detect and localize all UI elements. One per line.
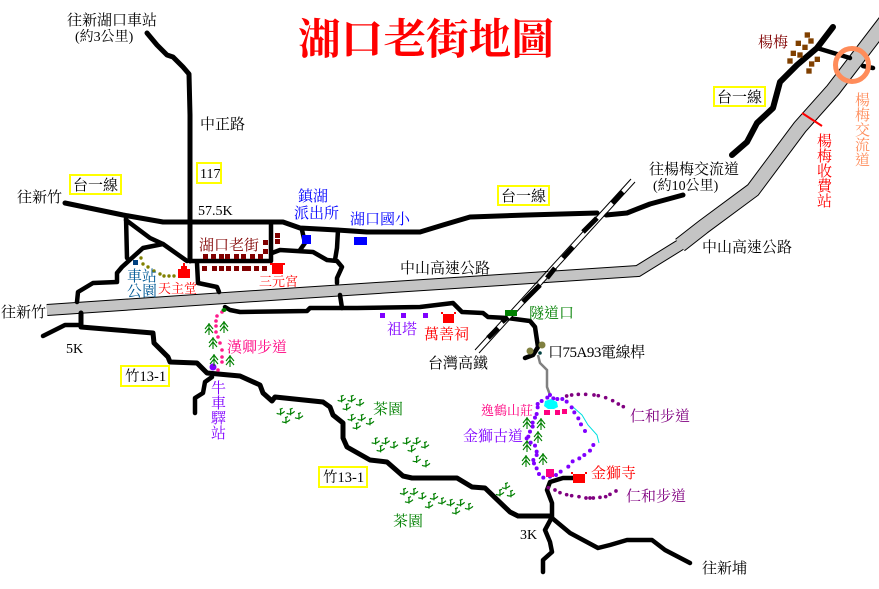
route sign: 竹13-1 east: 竹13-1 xyxy=(323,469,364,486)
icon: 逸鶴山莊 xyxy=(544,399,567,415)
road: 台一線 west xyxy=(65,203,597,232)
label: 往新埔: 往新埔 xyxy=(702,560,747,577)
route sign: 竹13-1 west xyxy=(121,366,169,386)
label: 楊梅交流道 vertical: 道 xyxy=(855,152,870,169)
toll station bar xyxy=(802,113,822,126)
label: 楊梅收費站 vertical: 楊 xyxy=(817,132,832,150)
label: 楊梅收費站 vertical: 站 xyxy=(817,193,832,210)
route sign: 竹13-1 west: 竹13-1 xyxy=(125,368,166,385)
route sign: 台一線 east: 台一線 xyxy=(717,89,762,106)
label: 3K: 3K xyxy=(520,528,537,543)
road: 竹13-1 xyxy=(81,313,550,516)
label: 車站公園: 公園 xyxy=(127,283,157,300)
icon: 牛車驛站 marker xyxy=(210,364,216,370)
label: 往新湖口車站: (約3公里) xyxy=(75,28,134,45)
label: 隧道口: 隧道口 xyxy=(529,305,574,322)
route sign: 117 xyxy=(197,163,221,183)
interchange circle xyxy=(836,48,868,82)
label: 57.5K: 57.5K xyxy=(198,204,233,219)
dots: 仁和步道 north xyxy=(565,392,625,408)
title: 湖口老街地圖 xyxy=(298,17,554,64)
label: 中山高速公路 west: 中山高速公路 xyxy=(400,259,490,277)
label: 祖塔: 祖塔 xyxy=(387,321,417,338)
icon: 隧道口 xyxy=(505,310,517,316)
road: 台一線 to 楊梅 xyxy=(732,27,833,155)
label: 牛車驛站: 驛 xyxy=(210,410,226,427)
楊梅 town markers xyxy=(787,32,820,74)
label: 茶園 south: 茶園 xyxy=(393,512,423,530)
label: 漢卿步道: 漢卿步道 xyxy=(227,338,287,356)
label: 湖口老街: 湖口老街 xyxy=(199,237,259,254)
icon: 湖口國小 xyxy=(354,237,367,245)
stream xyxy=(573,407,599,443)
label: 楊梅收費站 vertical: 費 xyxy=(817,177,833,195)
label: 5K: 5K xyxy=(66,342,83,357)
label: 往新竹 south: 往新竹 xyxy=(1,304,46,321)
route sign: 117: 117 xyxy=(200,167,220,182)
road: 金獅寺 to 3K xyxy=(543,478,573,572)
road: south of highway to tunnel xyxy=(225,303,538,358)
label: 往新湖口車站: 往新湖口車站 xyxy=(67,11,157,29)
label: 鎮湖派出所: 派出所 xyxy=(294,205,339,222)
label: 楊梅交流道 vertical: 交 xyxy=(855,122,870,139)
label: 楊梅交流道 vertical xyxy=(855,91,870,169)
icon: 漢卿步道 trailhead leaf xyxy=(222,308,226,312)
dots: 車站公園 trail xyxy=(139,256,176,278)
trees: 漢卿步道 xyxy=(205,321,234,367)
dots: 金獅古道 loop xyxy=(525,393,595,480)
label: 往新竹 north: 往新竹 xyxy=(17,189,62,206)
label: 往楊梅交流道: 往楊梅交流道 xyxy=(649,160,739,178)
tea plantation leaves xyxy=(277,395,515,515)
railway: 台灣高鐵 xyxy=(475,179,635,353)
label: 萬善祠: 萬善祠 xyxy=(424,325,469,343)
route sign: 台一線 centre: 台一線 xyxy=(501,188,546,205)
label: 台灣高鐵: 台灣高鐵 xyxy=(428,354,488,372)
label: 楊梅: 楊梅 xyxy=(758,33,788,51)
dots: 漢卿步道 xyxy=(214,310,224,372)
label: 楊梅收費站 vertical xyxy=(817,132,833,210)
label: 往楊梅交流道: (約10公里) xyxy=(653,177,719,194)
湖口老街 building markers xyxy=(202,233,280,271)
label: 口75A93電線桿: 口75A93電線桿 xyxy=(548,343,645,361)
label: 牛車驛站: 牛 xyxy=(211,380,226,397)
label: 金獅古道: 金獅古道 xyxy=(463,428,523,445)
icon: 萬善祠 shrine xyxy=(441,312,456,323)
highway: 中山高速公路 xyxy=(47,22,879,310)
label: 中山高速公路 east: 中山高速公路 xyxy=(702,238,792,256)
road: 中正路 xyxy=(147,33,190,261)
label: 鎮湖派出所 xyxy=(294,188,339,222)
route sign: 台一線 west: 台一線 xyxy=(73,177,118,194)
icon: 金獅寺 temple xyxy=(571,472,587,483)
label: 牛車驛站: 車 xyxy=(211,394,226,412)
icon: 天主堂 church xyxy=(178,263,190,278)
label: 楊梅交流道 vertical: 楊 xyxy=(855,91,870,109)
label: 牛車驛站 xyxy=(210,380,226,442)
label: 仁和步道 north: 仁和步道 xyxy=(630,408,690,425)
label: 天主堂: 天主堂 xyxy=(158,281,197,296)
icon: 派出所 xyxy=(302,235,311,244)
label: 楊梅收費站 vertical: 收 xyxy=(817,163,832,180)
icon: 三元宮 temple xyxy=(270,263,285,274)
label: 中正路: 中正路 xyxy=(200,116,245,133)
icon: 金獅古道 junction xyxy=(546,469,554,477)
trees: 金獅古道 xyxy=(522,417,547,467)
old street block roads xyxy=(77,217,342,308)
label: 楊梅交流道 vertical: 流 xyxy=(855,137,870,154)
icon: 車站公園 marker xyxy=(133,260,138,265)
route sign: 竹13-1 east xyxy=(319,467,367,487)
label: 車站公園 xyxy=(127,267,157,300)
label: 鎮湖派出所: 鎮湖 xyxy=(298,188,328,205)
road: 楊梅 interchange xyxy=(817,48,850,58)
label: 往新湖口車站 xyxy=(67,11,157,45)
path: gravel trail xyxy=(538,355,550,395)
label: 金獅寺: 金獅寺 xyxy=(591,465,636,482)
label: 車站公園: 車站 xyxy=(127,267,157,285)
dots: 仁和步道 south xyxy=(546,486,618,500)
road: 台一線 east xyxy=(606,195,683,215)
road: 牛車驛站 branch xyxy=(195,377,212,413)
label: 茶園 north: 茶園 xyxy=(373,400,403,418)
label: 牛車驛站: 站 xyxy=(211,425,226,442)
label: 仁和步道 south: 仁和步道 xyxy=(626,488,686,505)
label: 楊梅交流道 vertical: 梅 xyxy=(855,106,870,124)
road: 5K branch xyxy=(43,325,81,336)
icon: 祖塔 markers xyxy=(380,313,428,318)
tree symbols: 電線桿 xyxy=(526,342,546,355)
road: interchange east stub xyxy=(863,66,873,68)
label: 逸鶴山莊: 逸鶴山莊 xyxy=(481,403,533,418)
label: 三元宮: 三元宮 xyxy=(259,274,298,289)
road: 往新埔 xyxy=(552,518,690,563)
label: 楊梅收費站 vertical: 梅 xyxy=(817,147,832,165)
label: 往楊梅交流道 xyxy=(649,160,739,194)
label: 湖口國小: 湖口國小 xyxy=(350,211,411,228)
